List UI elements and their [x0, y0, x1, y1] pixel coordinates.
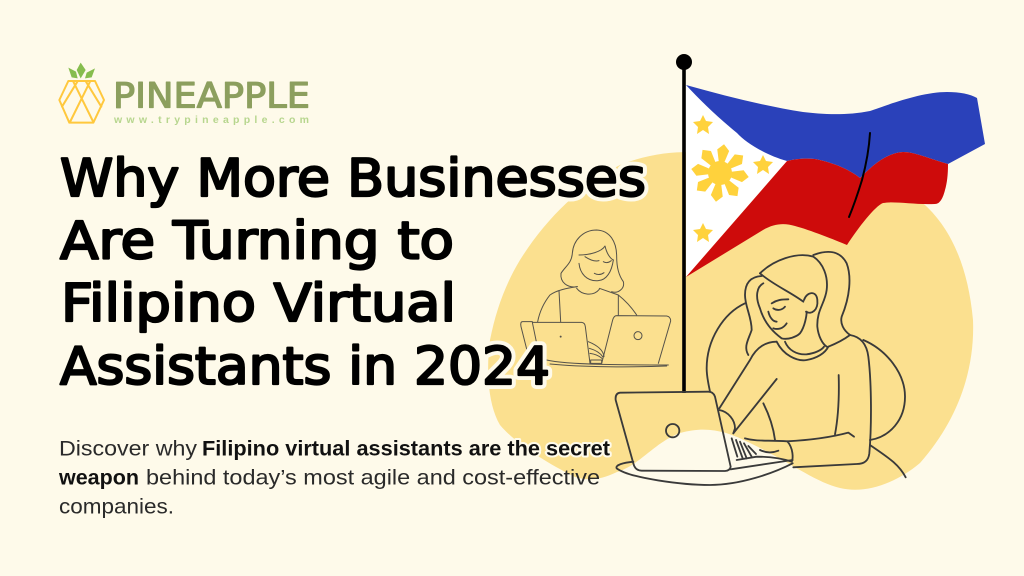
description text — [58, 436, 610, 518]
title: Are Turning to — [60, 212, 454, 272]
icon: pineapple — [59, 63, 104, 123]
flag red stripe — [686, 152, 948, 277]
logo url: www.trypineapple.com — [113, 114, 309, 126]
flag crease line — [849, 133, 870, 217]
description text: weapon — [58, 466, 139, 490]
flag stars — [693, 115, 773, 242]
flag pole — [676, 54, 692, 393]
large woman typing on laptop — [616, 252, 906, 485]
small woman with two laptops — [521, 230, 671, 367]
title: Assistants in 2024 — [60, 337, 550, 397]
title — [60, 149, 646, 397]
flag sun — [687, 140, 753, 206]
description text: behind today’s most agile and cost-effective — [146, 466, 600, 490]
title: Filipino Virtual — [61, 274, 456, 334]
description text: companies. — [59, 494, 174, 518]
title: Are Turning to — [60, 212, 454, 272]
logo: Pineapple — [59, 63, 310, 126]
title: Why More Businesses — [60, 149, 646, 209]
title: Assistants in 2024 — [60, 337, 550, 397]
Philippine flag — [686, 85, 985, 277]
title: Why More Businesses — [60, 149, 646, 209]
description text: Discover why — [59, 436, 197, 460]
logo wordmark: PINEAPPLE — [113, 76, 310, 116]
flag blue stripe — [686, 85, 985, 178]
title: Filipino Virtual — [61, 274, 456, 334]
yellow blob — [488, 152, 973, 490]
flag white triangle — [686, 85, 787, 277]
description text: Filipino virtual assistants are the secret — [202, 436, 610, 460]
